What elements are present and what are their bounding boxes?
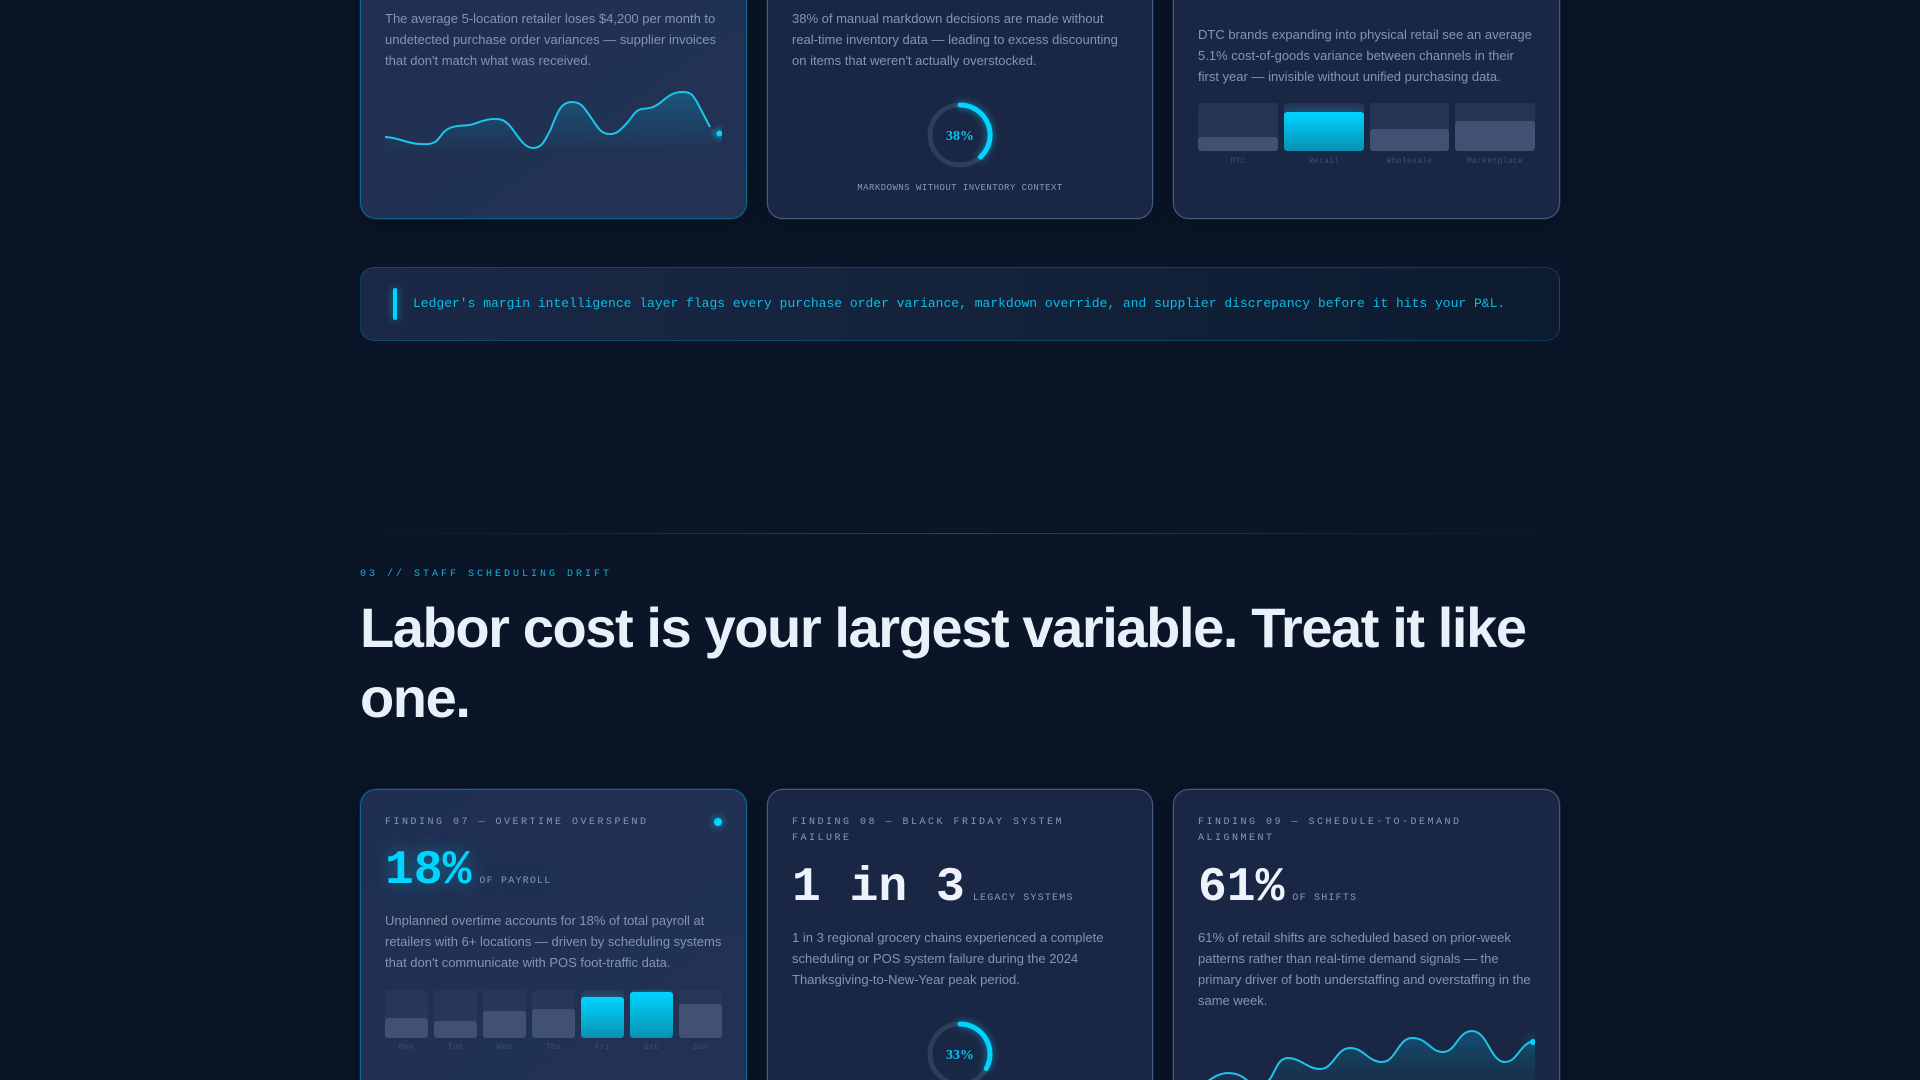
stat: 61%: 61% OF SHIFTS (1198, 861, 1357, 915)
label: finding 09 (1198, 817, 1462, 844)
text: markdown description: 38% of manual markdown decisions are made without (792, 11, 1103, 26)
label: finding 08: FINDING 08 — BLACK FRIDAY SYSTEM (792, 817, 1064, 828)
text: markdown description (792, 11, 1118, 68)
text: schedule alignment description: 61% of retail shifts are scheduled based on prior-week (1198, 930, 1511, 945)
section divider (360, 533, 1560, 534)
label: finding 09: FINDING 09 — SCHEDULE-TO-DEMAND (1198, 817, 1462, 828)
chart: channel bars (1198, 103, 1535, 166)
heading: Labor cost is your largest variable. Treat it like (360, 596, 1526, 659)
chart: channel bars: Wholesale (1387, 157, 1432, 166)
text: schedule alignment description: same week. (1198, 993, 1267, 1008)
chart: schedule sparkline (1208, 1030, 1535, 1080)
chart: weekday bars: Fri (595, 1043, 610, 1052)
text: system failure description: 1 in 3 regional grocery chains experienced a complete (792, 930, 1103, 945)
stat: 18%: 18% OF PAYROLL (385, 844, 551, 898)
chart: channel bars: DTC (1230, 157, 1246, 166)
stat: 1 in 3: 1 in 3 LEGACY SYSTEMS (792, 861, 1074, 915)
chart: weekday bars: Sat (644, 1043, 659, 1052)
accent bar (393, 288, 397, 320)
text: channel variance description: 5.1% cost-of-goods variance between channels in their (1198, 48, 1514, 63)
text: purchase order variance description (385, 11, 716, 68)
chart: channel bars: Marketplace (1467, 157, 1523, 166)
chart: weekday bars: Wed (497, 1043, 512, 1052)
panel: finding channel cost variance (1173, 0, 1560, 219)
text: channel variance description (1198, 27, 1532, 84)
label: finding 08: FAILURE (792, 833, 852, 844)
text: overtime description: Unplanned overtime accounts for 18% of total payroll at (385, 913, 704, 928)
section label: 03 // STAFF SCHEDULING DRIFT (360, 569, 612, 580)
text: ring caption: MARKDOWNS WITHOUT INVENTORY CONTEXT (857, 183, 1063, 193)
text: overtime description (385, 913, 721, 970)
text: schedule alignment description: patterns rather than real-time demand signals — the (1198, 951, 1499, 966)
panel: finding 09 schedule-to-demand alignment (1173, 789, 1560, 1080)
panel: finding manual markdowns (767, 0, 1153, 219)
chart: weekday bars: Thu (546, 1043, 561, 1052)
text: purchase order variance description: that don't match what was received. (385, 53, 591, 68)
text: system failure description: scheduling or POS system failure during the 2024 (792, 951, 1078, 966)
text: overtime description: that don't communicate with POS foot-traffic data. (385, 955, 670, 970)
heading (360, 596, 1526, 729)
label: finding 09: ALIGNMENT (1198, 833, 1275, 844)
panel: finding purchase order variance (360, 0, 747, 219)
text: channel variance description: first year — invisible without unified purchasing data. (1198, 69, 1501, 84)
text: purchase order variance description: undetected purchase order variances — supplier invoices (385, 32, 716, 47)
text: overtime description: retailers with 6+ locations — driven by scheduling systems (385, 934, 721, 949)
text: markdown description: real-time inventory data — leading to excess discounting (792, 32, 1118, 47)
chart: 33% ring (928, 1016, 998, 1080)
text: purchase order variance description: The average 5-location retailer loses $4,200 per month to (385, 11, 715, 26)
chart: weekday bars: Tue (448, 1043, 463, 1052)
label: finding 08 (792, 817, 1064, 844)
status dot (714, 818, 722, 826)
text: markdown description: on items that weren't actually overstocked. (792, 53, 1037, 68)
text: channel variance description: DTC brands expanding into physical retail see an average (1198, 27, 1532, 42)
callout: margin intelligence (360, 267, 1560, 341)
label: finding 07: FINDING 07 — OVERTIME OVERSPEND (385, 817, 649, 828)
panel: finding 08 black friday system failure (767, 789, 1153, 1080)
chart: 33% ring: 33% (946, 1048, 974, 1063)
text: system failure description: Thanksgiving-to-New-Year peak period. (792, 972, 1020, 987)
heading: one. (360, 666, 470, 729)
text: schedule alignment description: primary driver of both understaffing and overstaffing in the (1198, 972, 1531, 987)
text: schedule alignment description (1198, 930, 1531, 1008)
text: system failure description (792, 930, 1103, 987)
text: callout message: Ledger's margin intelligence layer flags every purchase order variance, markdown override, and supplier discrepancy before it hits your P&L. (413, 296, 1505, 311)
chart: channel bars: Retail (1309, 157, 1339, 166)
chart: weekday bars (385, 990, 722, 1052)
chart: weekday bars: Sun (693, 1043, 708, 1052)
chart: 38% ring: 38% (946, 129, 974, 144)
chart: 38% ring (928, 98, 998, 168)
chart: variance sparkline (385, 91, 722, 149)
panel: finding 07 overtime overspend (360, 789, 747, 1080)
chart: weekday bars: Mon (399, 1043, 414, 1052)
